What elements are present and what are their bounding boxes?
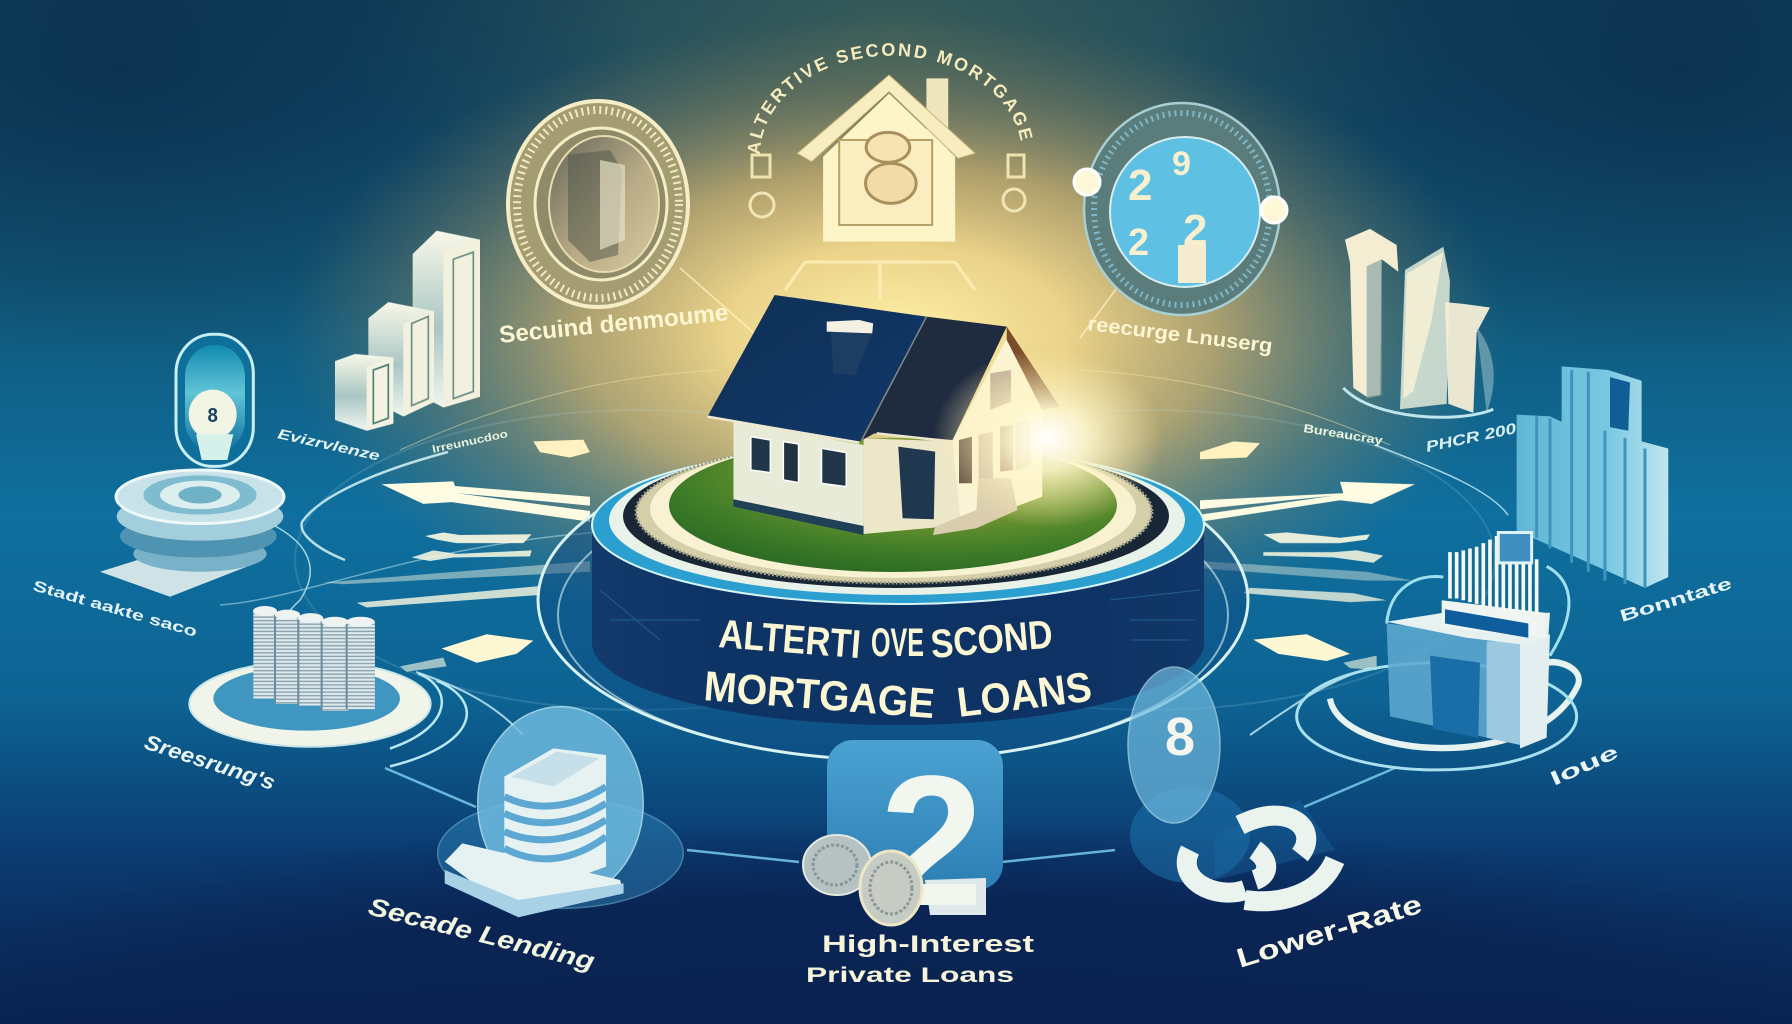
- label: small right: Bureaucray: [1303, 421, 1384, 448]
- seal emblem: second-home coin: [508, 101, 688, 307]
- label: recourse lending: reecurge Lnuserg: [1086, 313, 1274, 358]
- globe emblem with numerals: [1074, 103, 1287, 315]
- label: high-interest private loans: High-Interest: [822, 931, 1034, 958]
- label: streaming: Sreesrung's: [141, 731, 278, 795]
- globe emblem with numerals: 9: [1172, 145, 1191, 183]
- icon: bar chart buildings: [335, 231, 480, 431]
- icon: blue tower block: [1517, 366, 1668, 588]
- icon: crystal towers: [1343, 229, 1494, 417]
- label: bonntate: Bonntate: [1618, 574, 1734, 626]
- arched emblem lettering: [748, 43, 1033, 218]
- globe emblem with numerals: 2: [1128, 161, 1152, 210]
- sun flare by house: [933, 348, 1163, 528]
- emblem lines to the centre: [680, 262, 1130, 340]
- globe emblem with numerals: 2: [1183, 206, 1207, 255]
- house emblem with 8: [797, 75, 975, 242]
- label: high-interest private loans: Private Loans: [806, 964, 1014, 987]
- label: second home: Secuind denmoume: [498, 299, 729, 349]
- platform title: [702, 612, 1094, 727]
- house on platform: [707, 295, 1060, 535]
- icon: capsule with figure and swirl: 8: [1165, 707, 1195, 767]
- globe emblem with numerals: 2: [1128, 222, 1149, 264]
- arched emblem lettering: ALTERTIVE SECOND MORTGAGE: [748, 43, 1033, 154]
- arrows: left group: [323, 440, 590, 672]
- icon: capsule with figure and swirl: [1128, 667, 1335, 901]
- label: house: Ioue: [1547, 741, 1622, 791]
- label: secade lending: Secade Lending: [366, 893, 597, 976]
- platform title: LOANS: [954, 663, 1094, 726]
- icon: coin stack on disc: [189, 606, 467, 766]
- platform title: OVE: [871, 621, 924, 665]
- platform title: ALTERTI: [717, 612, 862, 667]
- label: lower-rate: Lower-Rate: [1233, 889, 1425, 974]
- icon: bank kiosk: [1297, 532, 1579, 770]
- arrows: right group: [1200, 441, 1415, 670]
- glass orbit rings around platform: [538, 440, 1248, 760]
- platform title: MORTGAGE: [702, 662, 936, 727]
- label: high-interest private loans: [806, 931, 1034, 987]
- central platform drum: [592, 438, 1204, 725]
- label: small far right: PHCR 200: [1424, 420, 1519, 456]
- icon: number 2 tile with coins: 2: [880, 738, 983, 945]
- platform title: SCOND: [929, 613, 1054, 667]
- orbit lines and connectors: [220, 370, 1508, 862]
- label: stadt rate: Stadt aakte saco: [31, 578, 199, 641]
- icon: number 2 tile with coins: [803, 738, 1003, 945]
- icon: pill badge on coin stack: [100, 334, 284, 597]
- icon: pill badge on coin stack: 8: [207, 405, 218, 427]
- label: small centre-left: Irreunucdoo: [431, 428, 509, 456]
- icon: capsule with money stack: [438, 707, 683, 917]
- label: small left: Evizrvlenze: [276, 425, 382, 464]
